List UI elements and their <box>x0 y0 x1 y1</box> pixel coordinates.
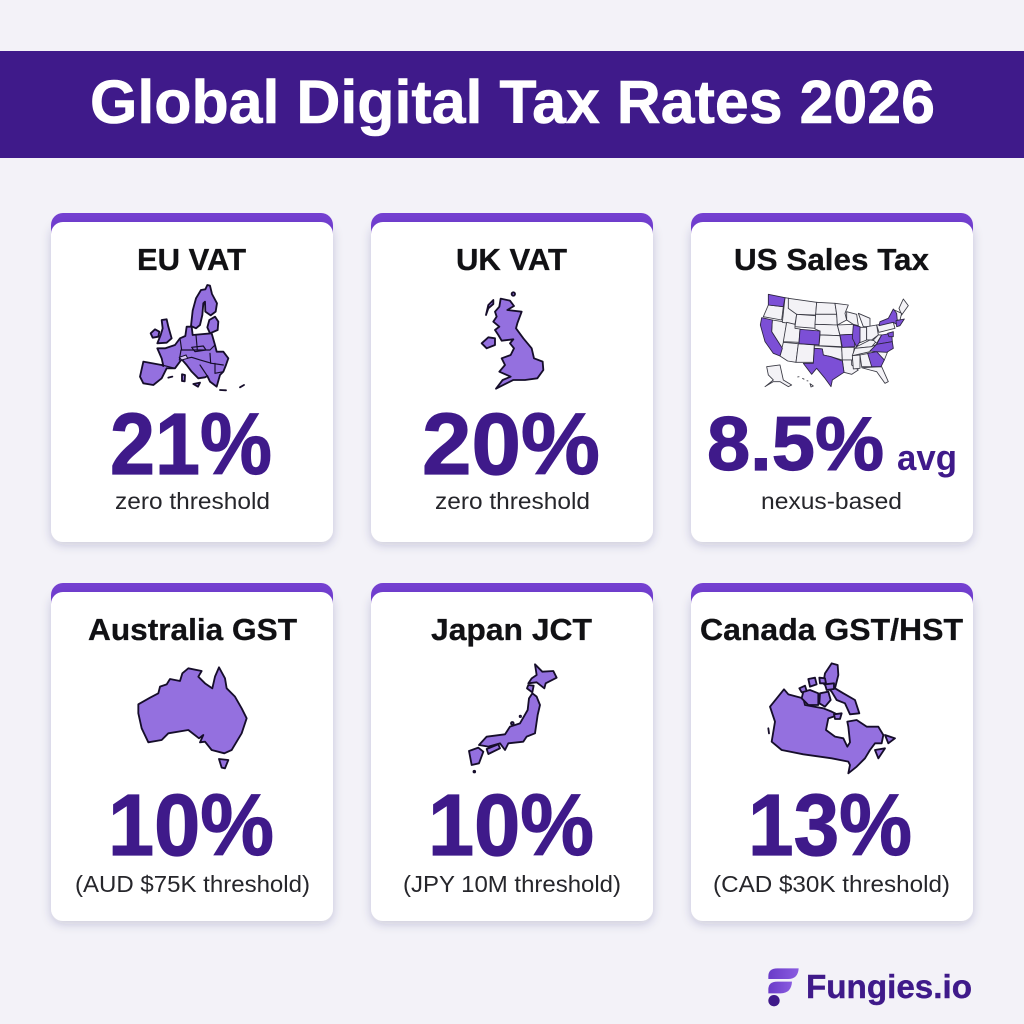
note: JPY threshold: (JPY 10M threshold) <box>403 871 621 897</box>
heading: Canada GST/HST: Canada GST/HST <box>700 612 963 647</box>
heading: Australia GST: Australia GST <box>88 612 297 647</box>
rate: 13%: 13% <box>748 777 912 874</box>
icon: US map <box>760 294 908 387</box>
logo: Fungies.io: Fungies.io <box>806 968 972 1005</box>
rate: 10%: 10% <box>428 777 594 874</box>
title banner <box>0 51 1024 158</box>
rate: 8.5% avg <box>707 402 957 487</box>
panel: EU VAT <box>51 213 333 542</box>
panel: Canada GST/HST <box>691 583 973 921</box>
panel: US Sales Tax <box>691 213 973 542</box>
icon: Canada map <box>768 663 895 773</box>
panel: UK VAT <box>371 213 653 542</box>
icon: UK map <box>482 292 543 389</box>
heading: US Sales Tax: US Sales Tax <box>734 242 930 277</box>
heading: EU VAT: EU VAT <box>137 242 246 277</box>
icon: Australia map <box>138 667 247 768</box>
panel: Japan JCT <box>371 583 653 921</box>
rate: 8.5% avg: 8.5% <box>707 402 884 487</box>
rate: 8.5% avg: avg <box>897 437 957 478</box>
rate: 10%: 10% <box>108 777 274 874</box>
icon: Fungies mark <box>768 968 799 1006</box>
heading: UK VAT: UK VAT <box>456 242 567 277</box>
rate: 21%: 21% <box>110 396 272 493</box>
note: nexus-based: nexus-based <box>761 488 902 514</box>
rate: 20%: 20% <box>422 396 600 493</box>
panel: Australia GST <box>51 583 333 921</box>
note: zero threshold: zero threshold <box>115 488 270 514</box>
note: CAD threshold: (CAD $30K threshold) <box>713 871 950 897</box>
icon: EU map <box>140 285 244 390</box>
note: zero threshold: zero threshold <box>435 488 590 514</box>
heading: Japan JCT: Japan JCT <box>431 612 592 647</box>
icon: Japan map <box>469 664 557 772</box>
note: AUD threshold: (AUD $75K threshold) <box>75 871 310 897</box>
title: Global Digital Tax Rates 2026 <box>90 68 935 136</box>
